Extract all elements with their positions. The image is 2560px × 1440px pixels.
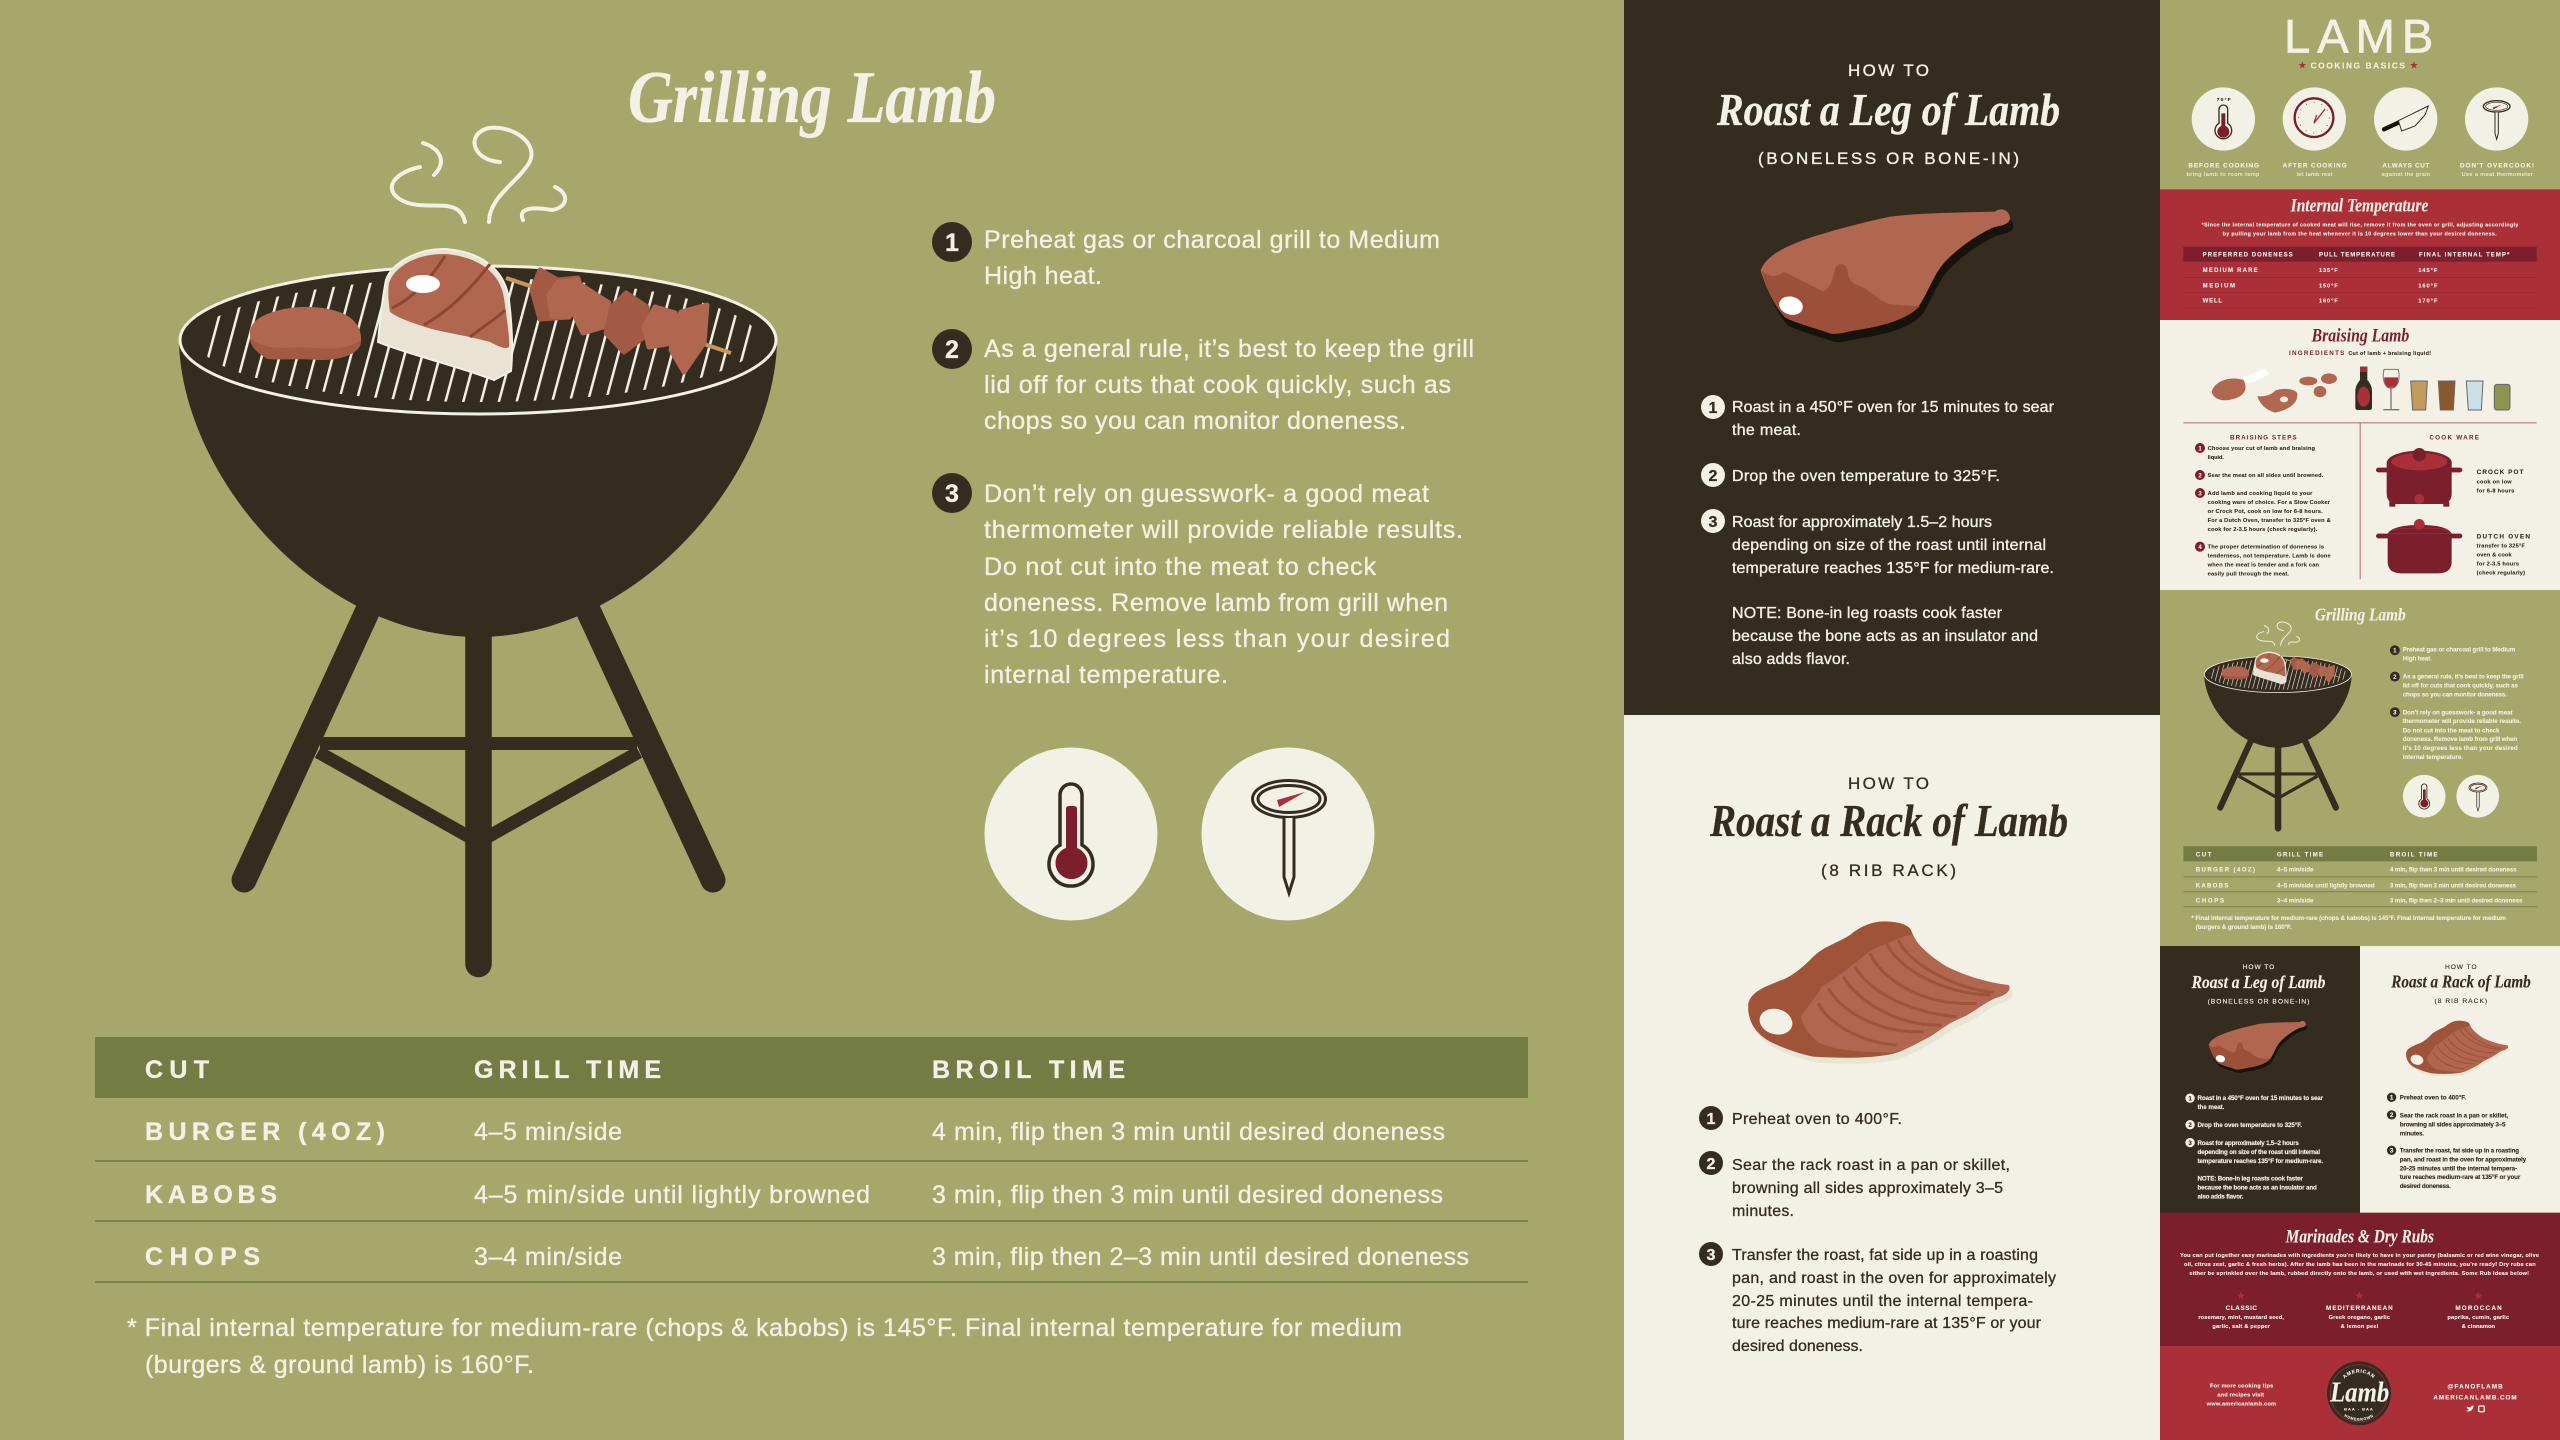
step 2: minutes. xyxy=(1732,1203,1794,1220)
thumbnail thermometer icon xyxy=(2403,775,2446,818)
crock pot text: cook on low xyxy=(2477,479,2512,485)
thumbnail rack steps xyxy=(2387,1093,2527,1190)
heading: how to roast a rack of lamb xyxy=(1709,774,2068,880)
note text xyxy=(2202,222,2518,237)
icon: after cooking clock xyxy=(2283,87,2346,151)
thumbnail footnote xyxy=(2191,915,2506,931)
dutch oven text: DUTCH OVEN xyxy=(2477,533,2530,540)
thumbnail heading xyxy=(2390,964,2531,1005)
step 3 xyxy=(1701,509,2054,577)
thumbnail leg steps: depending on size of the roast until internal xyxy=(2197,1149,2320,1156)
panel: thumbnail grilling lamb xyxy=(2160,590,2560,946)
subtitle: cooking basics: COOKING BASICS xyxy=(2311,61,2405,71)
rub: moroccan: paprika, cumin, garlic xyxy=(2447,1315,2509,1321)
thumbnail title: Grilling Lamb xyxy=(2315,605,2406,625)
note text: *Since the internal temperature of cooked meat will rise, remove it from the oven or grill, adjusting accordingly xyxy=(2202,222,2518,228)
table row: chops: 3–4 min/side xyxy=(474,1243,622,1271)
panel: thumbnail rack of lamb xyxy=(2360,946,2560,1213)
footnote: * Final internal temperature for medium-rare (chops & kabobs) is 145°F. Final internal temperature for medium xyxy=(127,1314,1402,1342)
thumbnail rack steps: 20-25 minutes until the internal tempera- xyxy=(2400,1166,2517,1173)
steps: roast a rack of lamb xyxy=(1699,1106,2056,1355)
rub: moroccan: ★ xyxy=(2473,1289,2483,1303)
dutch oven text: transfer to 325°F xyxy=(2477,543,2526,549)
crock pot text: for 6-8 hours xyxy=(2477,488,2514,494)
thumbnail contents: leg of lamb xyxy=(2185,964,2325,1200)
dutch oven text: oven & cook xyxy=(2477,552,2513,558)
footnote xyxy=(127,1314,1402,1379)
grill bowl xyxy=(179,345,777,637)
step 2: browning all sides approximately 3–5 xyxy=(1732,1180,2003,1197)
note xyxy=(1732,605,2038,668)
heading: how to roast a rack of lamb: HOW TO xyxy=(1848,774,1929,793)
thumbnail rack steps: minutes. xyxy=(2400,1131,2424,1138)
thumbnail step text: 2 xyxy=(2393,674,2397,681)
step 1: Preheat gas or charcoal grill to Medium xyxy=(984,226,1440,254)
table header xyxy=(95,1037,1528,1098)
rub: mediterranean: ★ xyxy=(2354,1289,2364,1303)
thumbnail table: BROIL TIME xyxy=(2390,851,2438,858)
thumbnail rack steps: 3 xyxy=(2390,1148,2394,1155)
step 1 xyxy=(1699,1106,1902,1130)
captions: basics: BEFORE COOKING xyxy=(2188,162,2259,169)
table: temperatures: 145°F xyxy=(2418,268,2438,274)
title: Grilling Lamb: Grilling Lamb xyxy=(628,57,996,139)
step 3: internal temperature. xyxy=(984,661,1228,689)
thumbnail table: 3–4 min/side xyxy=(2277,898,2314,905)
panel: roast a rack of lamb background xyxy=(1624,715,2160,1440)
braising steps: liquid. xyxy=(2208,455,2224,461)
thumbnail rack steps: Sear the rack roast in a pan or skillet, xyxy=(2400,1113,2508,1120)
braising steps: 2 xyxy=(2198,473,2202,479)
braising steps: For a Dutch Oven, transfer to 325°F oven & xyxy=(2208,518,2331,524)
footer text: social: @FANOFLAMB xyxy=(2447,1384,2503,1391)
panel: roast a leg of lamb background xyxy=(1624,0,2160,715)
braising steps: cook for 2-3.5 hours (check regularly). xyxy=(2208,527,2318,533)
braising steps: Sear the meat on all sides until browned. xyxy=(2208,473,2324,479)
heading: how to roast a rack of lamb: Roast a Rack of Lamb xyxy=(1709,795,2068,846)
thumbnail step text: thermometer will provide reliable results. xyxy=(2403,718,2521,725)
captions: basics: Use a meat thermometer xyxy=(2462,172,2533,178)
thumbnail step text: chops so you can monitor doneness. xyxy=(2403,691,2507,698)
thumbnail table: CHOPS xyxy=(2196,898,2224,905)
thumbnail leg steps: 3 xyxy=(2188,1140,2192,1147)
table row: burger: BURGER (4OZ) xyxy=(145,1118,385,1146)
step 3: depending on size of the roast until internal xyxy=(1732,537,2046,554)
table: temperatures: 160°F xyxy=(2418,283,2438,289)
icon: meat thermometer in circle xyxy=(1202,748,1374,920)
thumbnail step text: Do not cut into the meat to check xyxy=(2403,727,2500,734)
subtitle: cooking basics: ★ xyxy=(2410,61,2419,72)
icon: thermometer in circle xyxy=(984,748,1158,920)
braising steps: Add lamb and cooking liquid to your xyxy=(2208,491,2313,497)
intro text: You can put together easy marinades with ingredients you're likely to have in your pantry (balsamic or red wine vinegar, olive xyxy=(2180,1253,2539,1259)
rub: moroccan xyxy=(2447,1289,2509,1330)
heading: how to roast a leg of lamb xyxy=(1716,61,2060,168)
logo: American Lamb: AMERICAN xyxy=(2343,1369,2375,1379)
table row: burger xyxy=(95,1118,1528,1162)
panel: thumbnail leg of lamb xyxy=(2160,946,2360,1213)
thumbnail rack steps: 1 xyxy=(2390,1095,2394,1102)
braising steps: Choose your cut of lamb and braising xyxy=(2208,446,2316,452)
captions: basics: let lamb rest xyxy=(2297,172,2333,178)
logo: American Lamb: Lamb xyxy=(2329,1378,2389,1409)
footer text: social: AMERICANLAMB.COM xyxy=(2433,1394,2517,1401)
thumbnail step text: doneness. Remove lamb from grill when xyxy=(2403,736,2517,743)
thumbnail table: 3 min, flip then 2–3 min until desired doneness xyxy=(2390,898,2523,905)
icon: wine bottle xyxy=(2355,367,2372,410)
table row: kabobs xyxy=(95,1181,1528,1222)
icon: don't overcook thermometer xyxy=(2465,87,2528,151)
thumbnail leg steps: Roast in a 450°F oven for 15 minutes to sear xyxy=(2197,1095,2324,1102)
thumbnail leg illustration xyxy=(2209,1021,2307,1073)
panel: thumbnail braising lamb xyxy=(2160,320,2560,590)
captions: basics: bring lamb to room temp xyxy=(2187,172,2259,178)
heading: how to roast a rack of lamb: (8 RIB RACK) xyxy=(1821,861,1956,880)
panel: footer xyxy=(2160,1346,2560,1440)
rub: classic xyxy=(2198,1289,2284,1330)
braising steps: cooking ware of choice. For a Slow Cooker xyxy=(2208,500,2331,506)
thumbnail rack steps: Transfer the roast, fat side up in a roasting xyxy=(2400,1148,2519,1155)
table: temperatures: 150°F xyxy=(2319,283,2338,289)
heading: marinades and dry rubs: Marinades & Dry Rubs xyxy=(2285,1226,2434,1247)
dutch oven text: for 2-3.5 hours xyxy=(2477,561,2519,567)
step 2: chops so you can monitor doneness. xyxy=(984,407,1406,435)
step 1: 1 xyxy=(1709,400,1718,417)
step 3: it’s 10 degrees less than your desired xyxy=(984,625,1450,653)
thumbnail heading: (8 RIB RACK) xyxy=(2434,998,2487,1005)
table: temperatures: FINAL INTERNAL TEMP* xyxy=(2419,253,2510,259)
thumbnail grill illustration xyxy=(2204,622,2352,828)
table: temperatures: 135°F xyxy=(2319,268,2338,274)
step 3: thermometer will provide reliable results. xyxy=(984,516,1463,544)
icon: wine glass xyxy=(2383,369,2399,410)
thumbnail rack steps: browning all sides approximately 3–5 xyxy=(2400,1122,2506,1129)
rub: mediterranean: MEDITERRANEAN xyxy=(2326,1305,2393,1312)
step 3: desired doneness. xyxy=(1732,1338,1863,1355)
step 1: the meat. xyxy=(1732,422,1801,439)
steps: grilling instructions xyxy=(932,222,1474,689)
rub: classic: ★ xyxy=(2236,1289,2246,1303)
thumbnail table: CUT xyxy=(2196,851,2212,858)
icons: glasses and can xyxy=(2411,381,2510,410)
thumbnail leg steps: Drop the oven temperature to 325°F. xyxy=(2197,1122,2302,1129)
thumbnail step text: lid off for cuts that cook quickly, such as xyxy=(2403,682,2519,689)
logo: American Lamb: HOMEGROWN xyxy=(2344,1414,2374,1421)
thumbnail rack steps: desired doneness. xyxy=(2400,1183,2451,1190)
step 1 xyxy=(1701,395,2055,439)
captions: basics: against the grain xyxy=(2382,172,2430,178)
rub: classic: garlic, salt & pepper xyxy=(2212,1324,2271,1330)
table: temperatures: MEDIUM RARE xyxy=(2203,268,2258,274)
note: also adds flavor. xyxy=(1732,651,1850,668)
table row: chops xyxy=(95,1243,1528,1283)
table header: CUT xyxy=(145,1056,209,1084)
step 2: 2 xyxy=(1709,468,1718,485)
step 1: 1 xyxy=(945,229,959,257)
captions: basics: ALWAYS CUT xyxy=(2382,162,2429,169)
logo: American Lamb: BAA · BAA xyxy=(2344,1406,2374,1411)
table: temperatures: 170°F xyxy=(2418,299,2438,305)
subtitle: cooking basics: ★ xyxy=(2298,61,2307,72)
icon: before cooking thermometer xyxy=(2192,87,2255,151)
footnote: (burgers & ground lamb) is 160°F. xyxy=(145,1351,534,1379)
icon: instagram xyxy=(2479,1406,2484,1412)
thumbnail step text: High heat. xyxy=(2403,656,2432,663)
thumbnail heading: HOW TO xyxy=(2243,964,2274,971)
braising steps: easily pull through the meat. xyxy=(2208,572,2289,578)
rub: moroccan: & cinnamon xyxy=(2462,1324,2496,1330)
footer text: website xyxy=(2206,1383,2276,1407)
step 1 xyxy=(932,222,1440,290)
table: temperatures: WELL xyxy=(2203,299,2222,305)
braising steps: The proper determination of doneness is xyxy=(2208,545,2324,551)
thumbnail leg steps: Roast for approximately 1.5–2 hours xyxy=(2197,1140,2299,1147)
grill legs xyxy=(244,610,713,964)
footer text: website: For more cooking tips xyxy=(2210,1383,2273,1389)
step 3: 3 xyxy=(1709,514,1718,531)
food: lamb chop xyxy=(378,249,512,380)
step 1: Roast in a 450°F oven for 15 minutes to sear xyxy=(1732,399,2055,416)
rub: classic: CLASSIC xyxy=(2226,1305,2257,1312)
icon: knife xyxy=(2374,87,2437,151)
icons: lamb cuts xyxy=(2212,368,2337,413)
step 3: doneness. Remove lamb from grill when xyxy=(984,589,1448,617)
dutch oven text: (check regularly) xyxy=(2477,570,2525,576)
heading: internal temperature: Internal Temperature xyxy=(2290,196,2428,217)
table: temperatures: PULL TEMPERATURE xyxy=(2319,253,2395,259)
panel: thumbnail marinades and dry rubs xyxy=(2160,1212,2560,1440)
divider lines xyxy=(2183,422,2537,579)
thumbnail step text: Preheat gas or charcoal grill to Medium xyxy=(2403,647,2516,654)
rub: classic: rosemary, mint, mustard seed, xyxy=(2198,1315,2284,1321)
thumbnail leg steps: temperature reaches 135°F for medium-rare. xyxy=(2197,1158,2323,1165)
thumbnail contents: grilling xyxy=(2183,605,2537,931)
thumbnail footnote: (burgers & ground lamb) is 160°F. xyxy=(2196,924,2292,931)
braising steps: 3 xyxy=(2198,491,2202,497)
thumbnail heading: HOW TO xyxy=(2445,964,2477,971)
logo: American Lamb xyxy=(2327,1361,2391,1426)
table: temperatures: PREFERRED DONENESS xyxy=(2203,253,2293,259)
food: burger patty xyxy=(250,307,361,360)
step 2: 2 xyxy=(945,336,959,364)
captions: basics: DON'T OVERCOOK! xyxy=(2460,162,2534,169)
intro text xyxy=(2180,1253,2539,1277)
ingredients label: Cut of lamb + braising liquid! xyxy=(2348,351,2431,357)
table: cut, grill time, broil time xyxy=(95,1037,1528,1283)
dutch oven text xyxy=(2477,533,2530,576)
illustration: kettle grill with food and steam xyxy=(179,128,777,964)
thumbnail leg steps: NOTE: Bone-in leg roasts cook faster xyxy=(2197,1175,2303,1182)
braising steps: 1 xyxy=(2198,446,2202,452)
captions: basics: AFTER COOKING xyxy=(2283,162,2347,169)
thumbnail footnote: * Final internal temperature for medium-rare (chops & kabobs) is 145°F. Final internal temperature for medium xyxy=(2191,915,2506,922)
footer text: social xyxy=(2433,1384,2517,1401)
steps: roast a leg of lamb xyxy=(1701,395,2055,668)
thumbnail step text: 1 xyxy=(2393,647,2397,654)
thumbnail heading xyxy=(2191,964,2325,1005)
table row: kabobs: 4–5 min/side until lightly browned xyxy=(474,1181,870,1209)
grill rim and grate xyxy=(180,266,776,414)
step 3: 3 xyxy=(1707,1247,1716,1264)
step 2 xyxy=(932,329,1474,435)
step 3: ture reaches medium-rare at 135°F or your xyxy=(1732,1315,2042,1332)
table: temperatures: MEDIUM xyxy=(2203,283,2235,289)
braising steps: or Crock Pot, cook on low for 6-8 hours. xyxy=(2208,509,2323,515)
step 2: lid off for cuts that cook quickly, such as xyxy=(984,371,1451,399)
food: kabob skewer xyxy=(506,270,731,372)
thumbnail rack illustration xyxy=(2406,1021,2509,1076)
thumbnail table: 4 min, flip then 3 min until desired doneness xyxy=(2390,867,2517,874)
thumbnail step text: 3 xyxy=(2393,709,2397,716)
panel: thumbnail internal temperature xyxy=(2160,189,2560,320)
heading: how to roast a leg of lamb: HOW TO xyxy=(1848,61,1929,80)
thumbnail rack steps: ture reaches medium-rare at 135°F or your xyxy=(2400,1174,2521,1181)
thumbnail rack steps: 2 xyxy=(2390,1112,2394,1119)
thumbnail step text: it’s 10 degrees less than your desired xyxy=(2403,745,2518,752)
braising steps: when the meat is tender and a fork can xyxy=(2207,563,2320,569)
step 2: 2 xyxy=(1707,1156,1716,1173)
braising steps: tenderness, not temperature. Lamb is done xyxy=(2208,554,2331,560)
step 2: As a general rule, it’s best to keep the grill xyxy=(984,335,1474,363)
heading: braising lamb: Braising Lamb xyxy=(2311,326,2410,347)
rub: moroccan: MOROCCAN xyxy=(2455,1305,2502,1312)
step 3: temperature reaches 135°F for medium-rare. xyxy=(1732,560,2054,577)
rub: mediterranean: & lemon peel xyxy=(2341,1324,2379,1330)
thumbnail leg steps xyxy=(2185,1093,2324,1200)
table: temperatures: 160°F xyxy=(2319,299,2338,305)
icon: crock pot xyxy=(2378,448,2460,507)
thumbnail rack steps: pan, and roast in the oven for approximately xyxy=(2400,1157,2527,1164)
step 3: 3 xyxy=(945,480,959,508)
step 1: Preheat oven to 400°F. xyxy=(1732,1111,1902,1128)
icon: dutch oven xyxy=(2378,519,2460,573)
step 3: Do not cut into the meat to check xyxy=(984,553,1376,581)
ingredients label xyxy=(2289,350,2431,357)
table header: GRILL TIME xyxy=(474,1056,661,1084)
thumbnail contents: rack of lamb xyxy=(2387,964,2531,1190)
note: NOTE: Bone-in leg roasts cook faster xyxy=(1732,605,2003,622)
braising steps: 4 xyxy=(2198,545,2202,551)
crock pot text xyxy=(2477,469,2523,494)
thumbnail step text: Don’t rely on guesswork- a good meat xyxy=(2403,709,2513,716)
panel: thumbnail header, cooking basics xyxy=(2160,0,2560,189)
thumbnail table: 4–5 min/side xyxy=(2277,867,2314,874)
step 2: Sear the rack roast in a pan or skillet, xyxy=(1732,1157,2010,1174)
captions: basics xyxy=(2187,162,2534,178)
step 3: Transfer the roast, fat side up in a roasting xyxy=(1732,1247,2038,1264)
icon: steam xyxy=(392,128,565,222)
step 3 xyxy=(932,473,1463,689)
footer text: website: and recipes visit xyxy=(2217,1392,2264,1398)
thumbnail leg steps: 2 xyxy=(2188,1122,2192,1129)
step 3 xyxy=(1699,1242,2056,1355)
thumbnail table: KABOBS xyxy=(2196,882,2228,889)
crock pot text: CROCK POT xyxy=(2477,469,2523,476)
braising steps xyxy=(2195,434,2331,578)
intro text: oil, citrus zest, garlic & fresh herbs). After the lamb has been in the marinade for 30-45 minutes, you're ready! Dry rubs can xyxy=(2184,1262,2536,1268)
thumbnail step text xyxy=(2390,645,2524,761)
step 1: 1 xyxy=(1707,1111,1716,1128)
thumbnail table: GRILL TIME xyxy=(2277,851,2323,858)
thumbnail heading: Roast a Leg of Lamb xyxy=(2191,972,2325,992)
panel: grilling lamb background xyxy=(0,0,1624,1440)
footer text: website: www.americanlamb.com xyxy=(2206,1401,2276,1407)
table row: kabobs: 3 min, flip then 3 min until desired doneness xyxy=(932,1181,1443,1209)
rub: mediterranean: Greek oregano, garlic xyxy=(2329,1315,2390,1321)
thumbnail step text: As a general rule, it’s best to keep the grill xyxy=(2403,674,2524,681)
thumbnail table xyxy=(2183,846,2537,907)
thumbnail rack steps: Preheat oven to 400°F. xyxy=(2400,1095,2466,1102)
thumbnail heading: (BONELESS OR BONE-IN) xyxy=(2208,998,2309,1005)
step 3: pan, and roast in the oven for approximately xyxy=(1732,1270,2056,1287)
thumbnail meat thermometer icon xyxy=(2456,775,2499,818)
ingredients label: INGREDIENTS xyxy=(2289,350,2344,357)
step 2 xyxy=(1699,1151,2010,1220)
table: temperatures xyxy=(2183,247,2537,308)
braising steps: BRAISING STEPS xyxy=(2230,434,2297,441)
table row: burger: 4 min, flip then 3 min until desired doneness xyxy=(932,1118,1445,1146)
intro text: either be sprinkled over the lamb, rubbed directly onto the lamb, or used with wet ingredients. Some Rub ideas below! xyxy=(2189,1271,2529,1277)
table row: chops: CHOPS xyxy=(145,1243,260,1271)
thumbnail step text: internal temperature. xyxy=(2403,754,2463,761)
icon: before cooking thermometer: 70°F xyxy=(2217,97,2231,103)
step 3: 20-25 minutes until the internal tempera- xyxy=(1732,1293,2033,1310)
icon: twitter xyxy=(2466,1406,2474,1412)
step 2 xyxy=(1701,463,2000,487)
table header: BROIL TIME xyxy=(932,1056,1125,1084)
title: LAMB: LAMB xyxy=(2284,11,2433,64)
step 1: High heat. xyxy=(984,262,1102,290)
table row: chops: 3 min, flip then 2–3 min until desired doneness xyxy=(932,1243,1469,1271)
note text: by pulling your lamb from the heat whenever it is 10 degrees lower than your desired doneness. xyxy=(2223,231,2497,237)
thumbnail leg steps: because the bone acts as an insulator and xyxy=(2197,1184,2317,1191)
thumbnail leg steps: the meat. xyxy=(2197,1104,2225,1111)
illustration: leg of lamb xyxy=(1761,209,2013,342)
thumbnail table: 3 min, flip then 3 min until desired doneness xyxy=(2390,882,2517,889)
thumbnail table: 4–5 min/side until lightly browned xyxy=(2277,882,2375,889)
heading: how to roast a leg of lamb: (BONELESS OR BONE-IN) xyxy=(1758,149,2019,168)
cook ware heading: COOK WARE xyxy=(2429,434,2479,441)
step 2: Drop the oven temperature to 325°F. xyxy=(1732,468,2000,485)
rub: mediterranean xyxy=(2326,1289,2393,1330)
thumbnail leg steps: also adds flavor. xyxy=(2197,1193,2244,1200)
step 3: Roast for approximately 1.5–2 hours xyxy=(1732,514,1992,531)
heading: how to roast a leg of lamb: Roast a Leg of Lamb xyxy=(1716,84,2060,135)
thumbnail leg steps: 1 xyxy=(2188,1095,2192,1102)
thumbnail heading: Roast a Rack of Lamb xyxy=(2390,971,2531,991)
step 3: Don’t rely on guesswork- a good meat xyxy=(984,480,1429,508)
table row: kabobs: KABOBS xyxy=(145,1181,277,1209)
table row: burger: 4–5 min/side xyxy=(474,1118,622,1146)
thumbnail table: BURGER (4OZ) xyxy=(2196,867,2255,874)
illustration: rack of lamb xyxy=(1748,921,2013,1064)
note: because the bone acts as an insulator and xyxy=(1732,628,2038,645)
